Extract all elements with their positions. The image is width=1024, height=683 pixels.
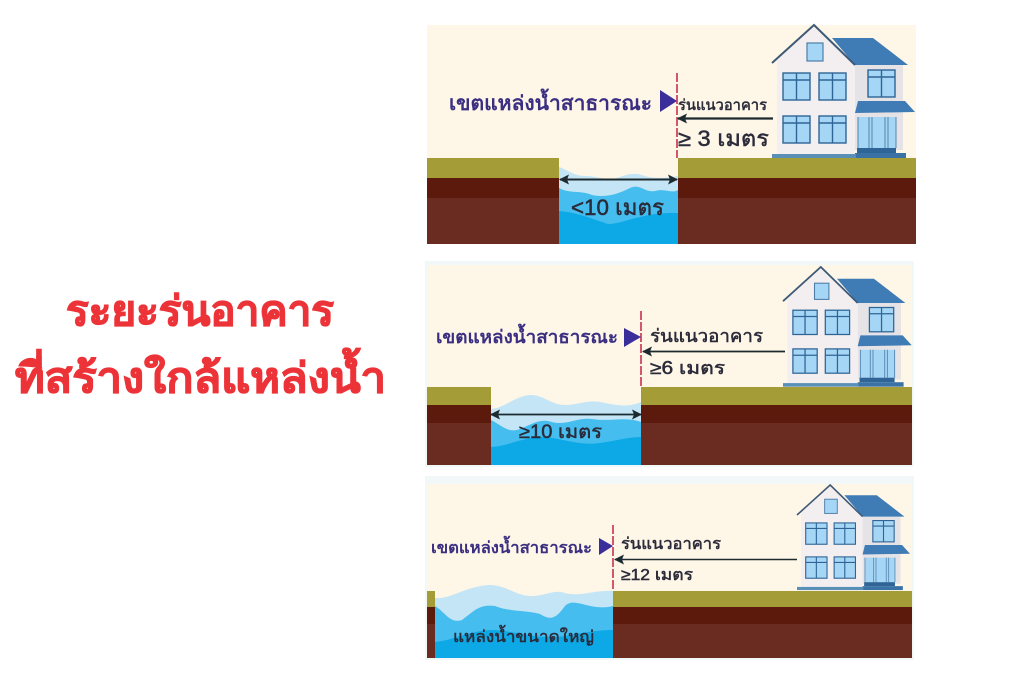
icon: triangle marker (599, 538, 613, 555)
icon: triangle marker (660, 90, 677, 112)
label: setback value: ≥ 3 เมตร (678, 126, 769, 151)
arrow: setback distance (643, 350, 785, 352)
water (559, 167, 678, 244)
ground: right bank (641, 387, 912, 465)
ground: left bank (427, 158, 559, 244)
arrow: water width (560, 178, 677, 180)
label: building setback: ร่นแนวอาคาร (678, 97, 767, 114)
title: ที่สร้างใกล้แหล่งน้ำ (15, 348, 386, 401)
dashed setback line (640, 311, 642, 387)
arrow: setback distance (615, 558, 797, 560)
water (491, 395, 641, 465)
arrow: water width (491, 414, 641, 416)
label: setback value: ≥12 เมตร (621, 567, 693, 584)
title (15, 288, 386, 401)
panel: large water body (425, 476, 914, 660)
label: public water zone: เขตแหล่งน้ำสาธารณะ (449, 88, 652, 115)
label: public water zone: เขตแหล่งน้ำสาธารณะ (431, 535, 592, 557)
ground: left bank (427, 387, 491, 465)
icon: house (772, 25, 915, 158)
label: setback value: ≥6 เมตร (650, 358, 725, 378)
arrow: setback distance (678, 117, 773, 120)
label: water width: <10 เมตร (571, 195, 664, 220)
label: large water body: แหล่งน้ำขนาดใหญ่ (453, 625, 594, 646)
panel: water 10 metres or more (425, 261, 914, 467)
ground: left strip (427, 591, 435, 658)
label: water width: ≥10 เมตร (519, 422, 602, 443)
water (435, 585, 613, 658)
label: building setback: ร่นแนวอาคาร (650, 326, 763, 346)
label: building setback: ร่นแนวอาคาร (621, 536, 721, 553)
ground: right bank (613, 591, 912, 658)
icon: house (797, 485, 910, 590)
dashed setback line (612, 525, 614, 591)
label: public water zone: เขตแหล่งน้ำสาธารณะ (436, 323, 618, 347)
icon: triangle marker (624, 328, 641, 347)
ground: right bank (678, 158, 916, 244)
panel: water under 10 metres (427, 25, 916, 244)
dashed setback line (676, 73, 678, 158)
icon: house (783, 267, 912, 387)
title: ระยะร่นอาคาร (66, 288, 334, 334)
